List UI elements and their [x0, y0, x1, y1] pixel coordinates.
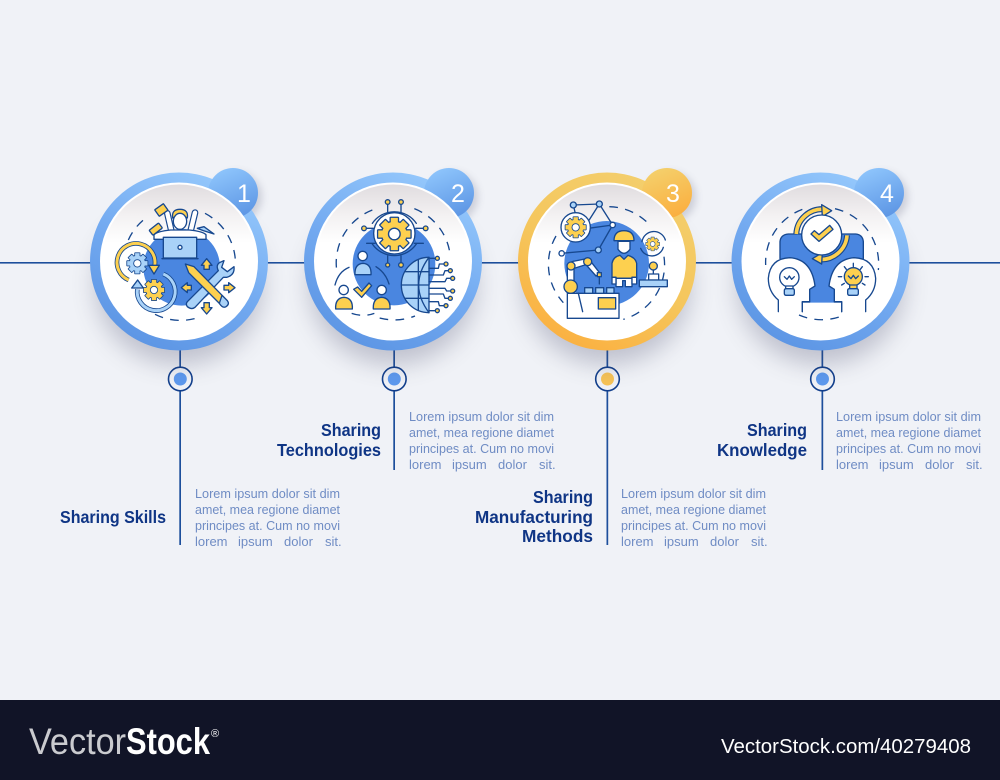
heading: Sharing Manufacturing Methods: Sharing — [533, 487, 593, 507]
text block: step 3 description: principes at. Cum no movi — [621, 518, 766, 533]
text block: step 3 description: Lorem ipsum dolor sit dim — [621, 486, 766, 501]
number badge 3 — [528, 168, 692, 340]
number badge 4 — [742, 168, 904, 340]
text block: step 2 description: lorem — [409, 457, 442, 472]
text block: step 4 description — [836, 409, 983, 472]
number badge 2 — [314, 168, 474, 340]
text block: step 4 description: dolor — [925, 457, 955, 472]
panel: step 3 circle — [518, 168, 696, 365]
panel: step 4 circle — [732, 168, 910, 365]
heading: Sharing Manufacturing Methods: Manufacturing — [475, 507, 593, 527]
heading: Sharing Manufacturing Methods: Methods — [522, 526, 593, 546]
footer logo: VectorStock — [29, 721, 219, 762]
text block: step 1 description: amet, mea regione diamet — [195, 502, 340, 517]
text block: step 3 description: sit. — [751, 534, 768, 549]
text block: step 4 description: lorem — [836, 457, 869, 472]
panel: step 2 circle — [304, 168, 482, 365]
text block: step 2 description: dolor — [498, 457, 528, 472]
step 4 stem and marker — [811, 345, 834, 470]
heading: Sharing Technologies — [277, 420, 381, 460]
footer logo: VectorStock: ® — [211, 728, 219, 740]
footer logo: VectorStock: Stock — [126, 721, 210, 762]
text block: step 2 description: Lorem ipsum dolor sit dim — [409, 409, 554, 424]
icon: manufacturing, robot arm, worker and gear network — [548, 201, 667, 319]
text block: step 3 description: lorem — [621, 534, 654, 549]
number badge 3: 3 — [666, 180, 680, 208]
heading: Sharing Manufacturing Methods — [475, 487, 593, 546]
heading: Sharing Skills: Sharing Skills — [60, 507, 166, 527]
panel: step 1 circle — [90, 168, 268, 365]
icon: technologies, gear network, people and digital globe — [335, 200, 455, 320]
heading: Sharing Technologies: Sharing — [321, 420, 381, 440]
text block: step 3 description: dolor — [710, 534, 740, 549]
heading: Sharing Knowledge: Knowledge — [717, 440, 807, 460]
number badge 2: 2 — [451, 180, 465, 208]
footer bar — [0, 700, 1000, 780]
text block: step 1 description: lorem — [195, 534, 228, 549]
text block: step 2 description: amet, mea regione diamet — [409, 425, 554, 440]
number badge 1 — [100, 168, 258, 340]
text block: step 1 description: dolor — [284, 534, 314, 549]
step 2 stem and marker — [382, 345, 406, 470]
heading: Sharing Technologies: Technologies — [277, 440, 381, 460]
text block: step 2 description: principes at. Cum no movi — [409, 441, 554, 456]
text block: step 4 description: Lorem ipsum dolor sit dim — [836, 409, 981, 424]
text block: step 4 description: amet, mea regione diamet — [836, 425, 981, 440]
text block: step 3 description — [621, 486, 768, 549]
text block: step 3 description: ipsum — [664, 534, 699, 549]
step 1 stem and marker — [168, 345, 192, 545]
number badge 1: 1 — [237, 180, 251, 208]
text block: step 1 description: sit. — [325, 534, 342, 549]
icon: skills, laptop worker, gears and tools — [117, 204, 235, 320]
text block: step 3 description: amet, mea regione diamet — [621, 502, 766, 517]
footer logo: VectorStock: Vector — [29, 721, 126, 762]
icon: knowledge, two heads exchanging ideas — [766, 205, 879, 320]
text block: step 4 description: sit. — [966, 457, 983, 472]
text block: step 1 description: Lorem ipsum dolor sit dim — [195, 486, 340, 501]
text block: step 1 description: principes at. Cum no movi — [195, 518, 340, 533]
text block: step 1 description: ipsum — [238, 534, 273, 549]
text block: step 4 description: principes at. Cum no movi — [836, 441, 981, 456]
text block: step 2 description: ipsum — [452, 457, 487, 472]
horizontal timeline line — [0, 262, 1000, 264]
text block: step 2 description — [409, 409, 556, 472]
footer image id: VectorStock.com/40279408 — [721, 736, 971, 758]
text block: step 4 description: ipsum — [879, 457, 914, 472]
text block: step 2 description: sit. — [539, 457, 556, 472]
text block: step 1 description — [195, 486, 342, 549]
number badge 4: 4 — [880, 180, 894, 208]
step 3 stem and marker — [596, 345, 619, 545]
heading: Sharing Knowledge: Sharing — [747, 420, 807, 440]
heading: Sharing Knowledge — [717, 420, 807, 460]
